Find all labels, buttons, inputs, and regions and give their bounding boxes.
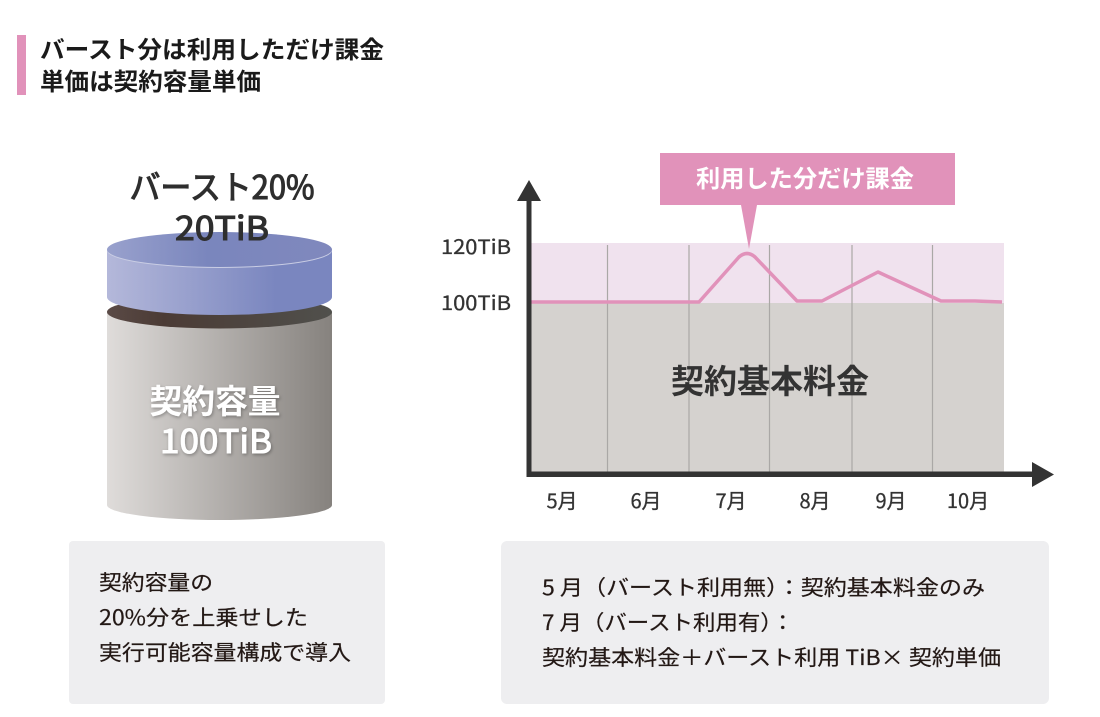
burst label: バースト20%: [130, 161, 314, 209]
panel: capacity note: 契約容量の: [99, 567, 213, 597]
usage line: [530, 254, 1002, 302]
callout: 利用した分だけ課金: [696, 159, 914, 194]
panel: billing note: 7 月（バースト利用有）：: [542, 607, 794, 637]
area label: 契約基本料金: [671, 355, 869, 403]
y axis labels: 100TiB: [441, 287, 511, 316]
capacity label: 100TiB: [160, 415, 272, 463]
month labels: 9月: [875, 485, 907, 514]
month labels: 6月: [630, 485, 662, 514]
title text: 単価は契約容量単価: [40, 62, 261, 97]
title text: バースト分は利用しただけ課金: [40, 30, 384, 65]
month labels: 5月: [546, 485, 578, 514]
month labels: [546, 485, 989, 514]
burst band: [529, 243, 1004, 303]
panel: billing note: 5 月（バースト利用無）：契約基本料金のみ: [542, 572, 985, 602]
burst label: [130, 161, 314, 250]
burst label: 20TiB: [175, 202, 269, 250]
y axis labels: [441, 231, 511, 316]
panel: capacity note: [69, 541, 385, 704]
accent bar: [17, 35, 26, 95]
month labels: 7月: [715, 485, 747, 514]
capacity label: 契約容量: [150, 375, 280, 423]
x axis arrow: [526, 462, 1054, 487]
month labels: 8月: [799, 485, 831, 514]
chart: [441, 153, 1054, 514]
capacity cylinder: [107, 296, 332, 520]
title text: [40, 30, 384, 97]
y axis labels: 120TiB: [441, 231, 511, 260]
panel: billing note: 契約基本料金＋バースト利用 TiB× 契約単価: [542, 642, 1001, 672]
title: [17, 30, 384, 97]
cylinder diagram: [107, 161, 332, 520]
burst cylinder: [107, 232, 332, 315]
y axis arrow: [517, 180, 541, 474]
capacity label: [150, 375, 280, 463]
panel: billing note: [501, 541, 1049, 704]
panel: capacity note: 20%分を上乗せした: [99, 602, 308, 632]
month grid lines: [608, 245, 932, 472]
panel: capacity note: 実行可能容量構成で導入: [99, 637, 351, 667]
base fee area: [529, 303, 1004, 474]
month labels: 10月: [947, 485, 989, 514]
callout: [660, 153, 955, 249]
